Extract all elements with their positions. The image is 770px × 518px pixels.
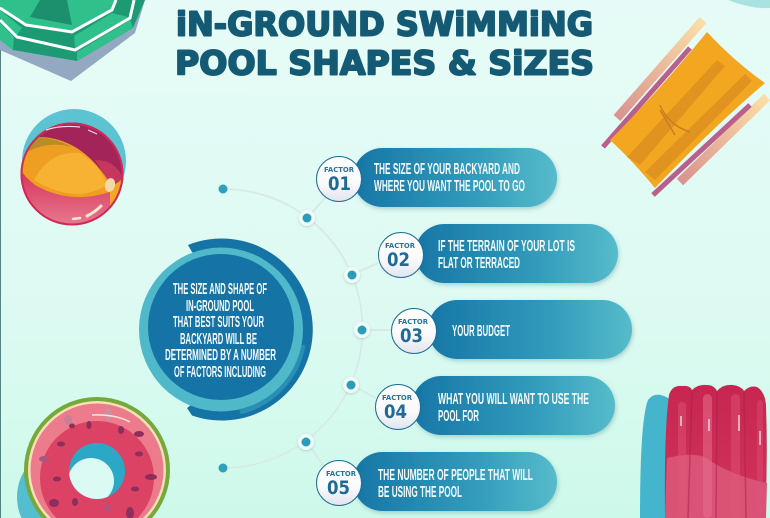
panel: factor 01: WHERE YOU WANT THE POOL TO GO bbox=[374, 178, 525, 195]
connector arc with nodes bbox=[218, 184, 392, 472]
panel: factor 01: FACTOR bbox=[324, 166, 355, 174]
panel: factor 02 bbox=[378, 224, 618, 283]
panel: factor 03: YOUR BUDGET bbox=[452, 323, 510, 340]
panel: factor 02: 02 bbox=[387, 250, 410, 271]
panel: factor 01 bbox=[316, 148, 557, 207]
intro text: THE SIZE AND SHAPE OF bbox=[173, 281, 267, 298]
title: POOL SHAPES & SiZES bbox=[175, 44, 594, 82]
panel: factor 02: FACTOR bbox=[385, 242, 416, 250]
icon: red air mattress bbox=[640, 385, 767, 518]
intro text: OF FACTORS INCLUDING bbox=[174, 364, 266, 381]
panel: factor 01: THE SIZE OF YOUR BACKYARD AND bbox=[374, 161, 520, 178]
intro text bbox=[165, 281, 276, 381]
intro text: THAT BEST SUITS YOUR bbox=[173, 314, 264, 331]
panel: factor 02: FLAT OR TERRACED bbox=[438, 255, 520, 272]
panel: factor 05: 05 bbox=[327, 478, 350, 499]
title bbox=[175, 4, 594, 82]
panel: factor 05: FACTOR bbox=[326, 470, 357, 478]
panel: factor 03 bbox=[392, 300, 632, 359]
icon: beach umbrella bbox=[0, 0, 145, 81]
panel: factor 04 bbox=[376, 376, 615, 435]
panel: factor 04: POOL FOR bbox=[438, 408, 479, 425]
panel: factor 01: 01 bbox=[328, 174, 351, 195]
panel: factor 05: BE USING THE POOL bbox=[378, 484, 462, 501]
water corner top right bbox=[728, 0, 770, 8]
panel: factor 02: IF THE TERRAIN OF YOUR LOT IS bbox=[438, 238, 575, 255]
icon: watermelon swim ring bbox=[17, 397, 170, 518]
icon: yellow pool raft bbox=[603, 20, 767, 195]
panel: factor 05 bbox=[316, 452, 557, 511]
panel: factor 04: FACTOR bbox=[382, 394, 413, 402]
intro text: BACKYARD WILL BE bbox=[180, 331, 257, 348]
intro text: DETERMINED BY A NUMBER bbox=[165, 347, 276, 364]
intro text: IN-GROUND POOL bbox=[186, 298, 254, 315]
title: iN-GROUND SWiMMiNG bbox=[176, 4, 593, 44]
panel: factor 03: 03 bbox=[400, 326, 423, 347]
panel: factor 03: FACTOR bbox=[398, 318, 429, 326]
icon: beach ball bbox=[18, 109, 128, 230]
panel: factor 05: THE NUMBER OF PEOPLE THAT WILL bbox=[378, 467, 533, 484]
panel: factor 04: WHAT YOU WILL WANT TO USE THE bbox=[438, 391, 589, 408]
panel: factor 04: 04 bbox=[384, 402, 407, 423]
panel: central intro circle bbox=[139, 239, 313, 421]
